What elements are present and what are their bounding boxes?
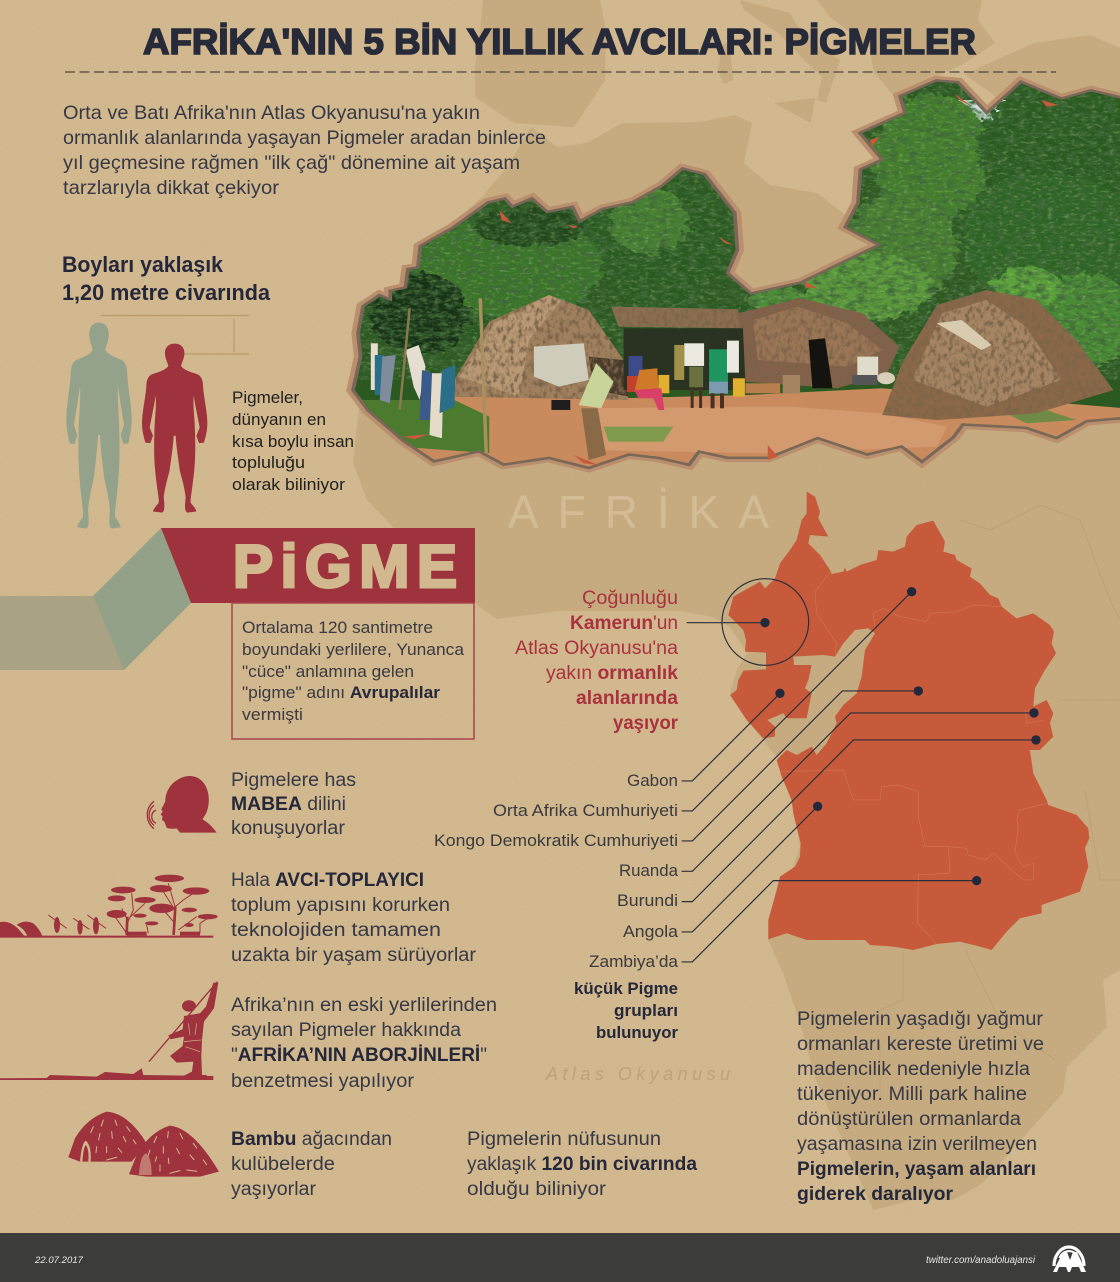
text: Aborigines of Africa: Afrika’nın en eski yerlilerinden <box>231 995 497 1016</box>
callout: Cameroon: Çoğunluğu <box>582 588 678 609</box>
photo hut centre <box>738 298 900 388</box>
icon: speaking head <box>147 776 217 833</box>
text: Aborigines of Africa: benzetmesi yapılıyor <box>231 1071 415 1092</box>
land: Iberia <box>475 0 606 127</box>
list: country labels: Angola <box>623 923 679 941</box>
text: rainforest threat: Pigmelerin yaşadığı yağmur <box>797 1009 1044 1030</box>
text: rainforest threat: yaşamasına izin verilmeyen <box>797 1134 1037 1155</box>
text: hunter gatherer: Hala AVCI-TOPLAYICI <box>231 870 424 891</box>
human silhouette: average height <box>66 323 132 529</box>
list: country labels: Ruanda <box>619 862 679 880</box>
footer bar <box>0 1233 1120 1282</box>
text: Aborigines of Africa: sayılan Pigmeler hakkında <box>231 1020 461 1041</box>
icon: bamboo huts <box>68 1112 219 1177</box>
ribbon: PİGME wordmark: PiGME <box>233 533 457 600</box>
text: rainforest threat <box>797 1009 1044 1205</box>
callout: Cameroon: yakın ormanlık <box>546 663 678 684</box>
label: AFRİKA on map: AFRİKA <box>508 486 769 538</box>
definition text: Ortalama 120 santimetre <box>242 618 433 637</box>
list: country labels: Kongo Demokratik Cumhuriyeti <box>434 832 678 850</box>
intro text: yıl geçmesine rağmen "ilk çağ" dönemine ait yaşam <box>63 152 520 174</box>
text: rainforest threat: Pigmelerin, yaşam alanları <box>797 1159 1036 1180</box>
photo blanket and stump <box>579 363 614 408</box>
icon: spear hunter on one leg <box>0 982 218 1080</box>
height comparison guide lines <box>101 316 249 354</box>
intro text: Orta ve Batı Afrika'nın Atlas Okyanusu'na yakın <box>63 102 480 124</box>
definition text: boyundaki yerlilere, Yunanca <box>242 640 465 659</box>
text: shortest people: topluluğu <box>232 453 305 472</box>
text: population: Pigmelerin nüfusunun <box>467 1129 661 1150</box>
footer social handle: twitter.com/anadoluajansi <box>926 1255 1036 1266</box>
photo laundry <box>371 343 378 390</box>
photo hut left <box>454 295 628 400</box>
text: hunter gatherer <box>231 870 477 966</box>
text: bamboo huts: yaşıyorlar <box>231 1179 317 1200</box>
callout: Cameroon: Kamerun'un <box>570 613 678 634</box>
photo torn edge <box>355 82 1120 467</box>
text: small pygmy groups: bulunuyor <box>596 1024 679 1042</box>
list: country labels: Burundi <box>617 892 678 910</box>
text: population <box>467 1129 697 1200</box>
land: Sicily <box>774 98 815 123</box>
list: country labels: Zambiya’da <box>589 953 679 971</box>
label: Atlantic Ocean: Atlas Okyanusu <box>545 1064 730 1084</box>
map: leader lines <box>682 592 1036 962</box>
land: Sardinia <box>718 43 733 84</box>
intro text <box>63 102 546 199</box>
land: Arabia <box>965 35 1120 110</box>
text: rainforest threat: giderek daralıyor <box>797 1184 954 1205</box>
definition text <box>242 618 465 724</box>
text: Mabea language <box>231 770 356 839</box>
intro text: tarzlarıyla dikkat çekiyor <box>63 177 280 199</box>
photo ground <box>396 388 1120 466</box>
map: location dots <box>760 587 1041 885</box>
map: inner country borders <box>782 572 1047 944</box>
text: small pygmy groups <box>574 980 679 1042</box>
text: Mabea language: konuşuyorlar <box>231 818 346 839</box>
photo people <box>628 356 642 377</box>
photo: Pygmy village in torn paper frame <box>340 80 1120 480</box>
land: Africa <box>353 115 1120 1210</box>
footer date: 22.07.2017 <box>34 1255 84 1266</box>
text: bamboo huts <box>231 1129 392 1200</box>
intro text: ormanlık alanlarında yaşayan Pigmeler aradan binlerce <box>63 127 546 149</box>
list: country labels <box>434 772 679 971</box>
title: AFRİKA'NIN 5 BİN YILLIK AVCILARI: PİGMELER <box>143 21 976 62</box>
icon: hunter gatherer scene <box>0 875 218 938</box>
map: Africa and southern Europe landmass <box>353 0 1120 1210</box>
text: bamboo huts: Bambu ağacından <box>231 1129 392 1150</box>
map: Cameroon circle callout <box>722 579 809 665</box>
text: Aborigines of Africa: "AFRİKA’NIN ABORJİNLERİ" <box>231 1045 487 1066</box>
text: rainforest threat: madencilik nedeniyle hızla <box>797 1059 1030 1080</box>
text: shortest people: dünyanın en <box>232 410 326 429</box>
text: population: olduğu biliniyor <box>467 1179 607 1200</box>
title divider dashed <box>65 71 1056 73</box>
ribbon: tail <box>0 596 124 670</box>
text: shortest people: Pigmeler, <box>232 388 303 407</box>
callout: Cameroon: yaşıyor <box>613 713 679 734</box>
text: Mabea language: MABEA dilini <box>231 794 346 815</box>
definition text: "pigme" adını Avrupalılar <box>242 683 440 702</box>
text: bamboo huts: kulübelerde <box>231 1154 335 1175</box>
icon: AA logo <box>1053 1247 1086 1272</box>
ribbon: fold <box>93 528 191 670</box>
definition box <box>232 603 474 739</box>
text: Mabea language: Pigmelere has <box>231 770 356 791</box>
definition text: vermişti <box>242 705 303 724</box>
photo shelter roof <box>611 307 740 328</box>
text: rainforest threat: tükeniyor. Milli park haline <box>797 1084 1027 1105</box>
text: rainforest threat: ormanları kereste üretimi ve <box>797 1034 1044 1055</box>
photo hut right <box>882 290 1113 420</box>
photo edge orange accents <box>402 93 1059 465</box>
text: shortest people: kısa boylu insan <box>232 432 354 451</box>
definition text: "cüce" anlamına gelen <box>242 662 414 681</box>
callout: Cameroon: Atlas Okyanusu'na <box>515 638 678 659</box>
land: Balkans <box>817 0 995 97</box>
text: small pygmy groups: grupları <box>614 1002 678 1020</box>
list: country labels: Gabon <box>627 772 678 790</box>
ribbon: PİGME banner <box>0 528 475 670</box>
photo huts <box>454 290 1113 420</box>
heading: height: 1,20 metre civarında <box>62 280 271 305</box>
text: hunter gatherer: toplum yapısını korurken <box>231 895 450 916</box>
ribbon: red band <box>161 528 475 603</box>
callout: Cameroon: alanlarında <box>576 688 678 709</box>
human silhouette: pygmy height <box>142 344 207 513</box>
photo image <box>340 80 1120 480</box>
map: highlighted central African countries <box>682 492 1089 962</box>
text: Aborigines of Africa <box>231 995 497 1092</box>
land: Italy <box>740 0 840 103</box>
heading: height <box>62 252 271 305</box>
text: shortest people: olarak biliniyor <box>232 475 345 494</box>
text: rainforest threat: dönüştürülen ormanlarda <box>797 1109 1021 1130</box>
heading: height: Boyları yaklaşık <box>62 252 224 277</box>
text: hunter gatherer: uzakta bir yaşam sürüyorlar <box>231 945 477 966</box>
list: country labels: Orta Afrika Cumhuriyeti <box>493 802 678 820</box>
text: hunter gatherer: teknolojiden tamamen <box>231 920 441 941</box>
map: country borders in the surrounding land <box>880 505 1120 1100</box>
text: shortest people <box>232 388 354 494</box>
text: population: yaklaşık 120 bin civarında <box>467 1154 697 1175</box>
text: small pygmy groups: küçük Pigme <box>574 980 678 998</box>
callout: Cameroon <box>515 588 679 734</box>
